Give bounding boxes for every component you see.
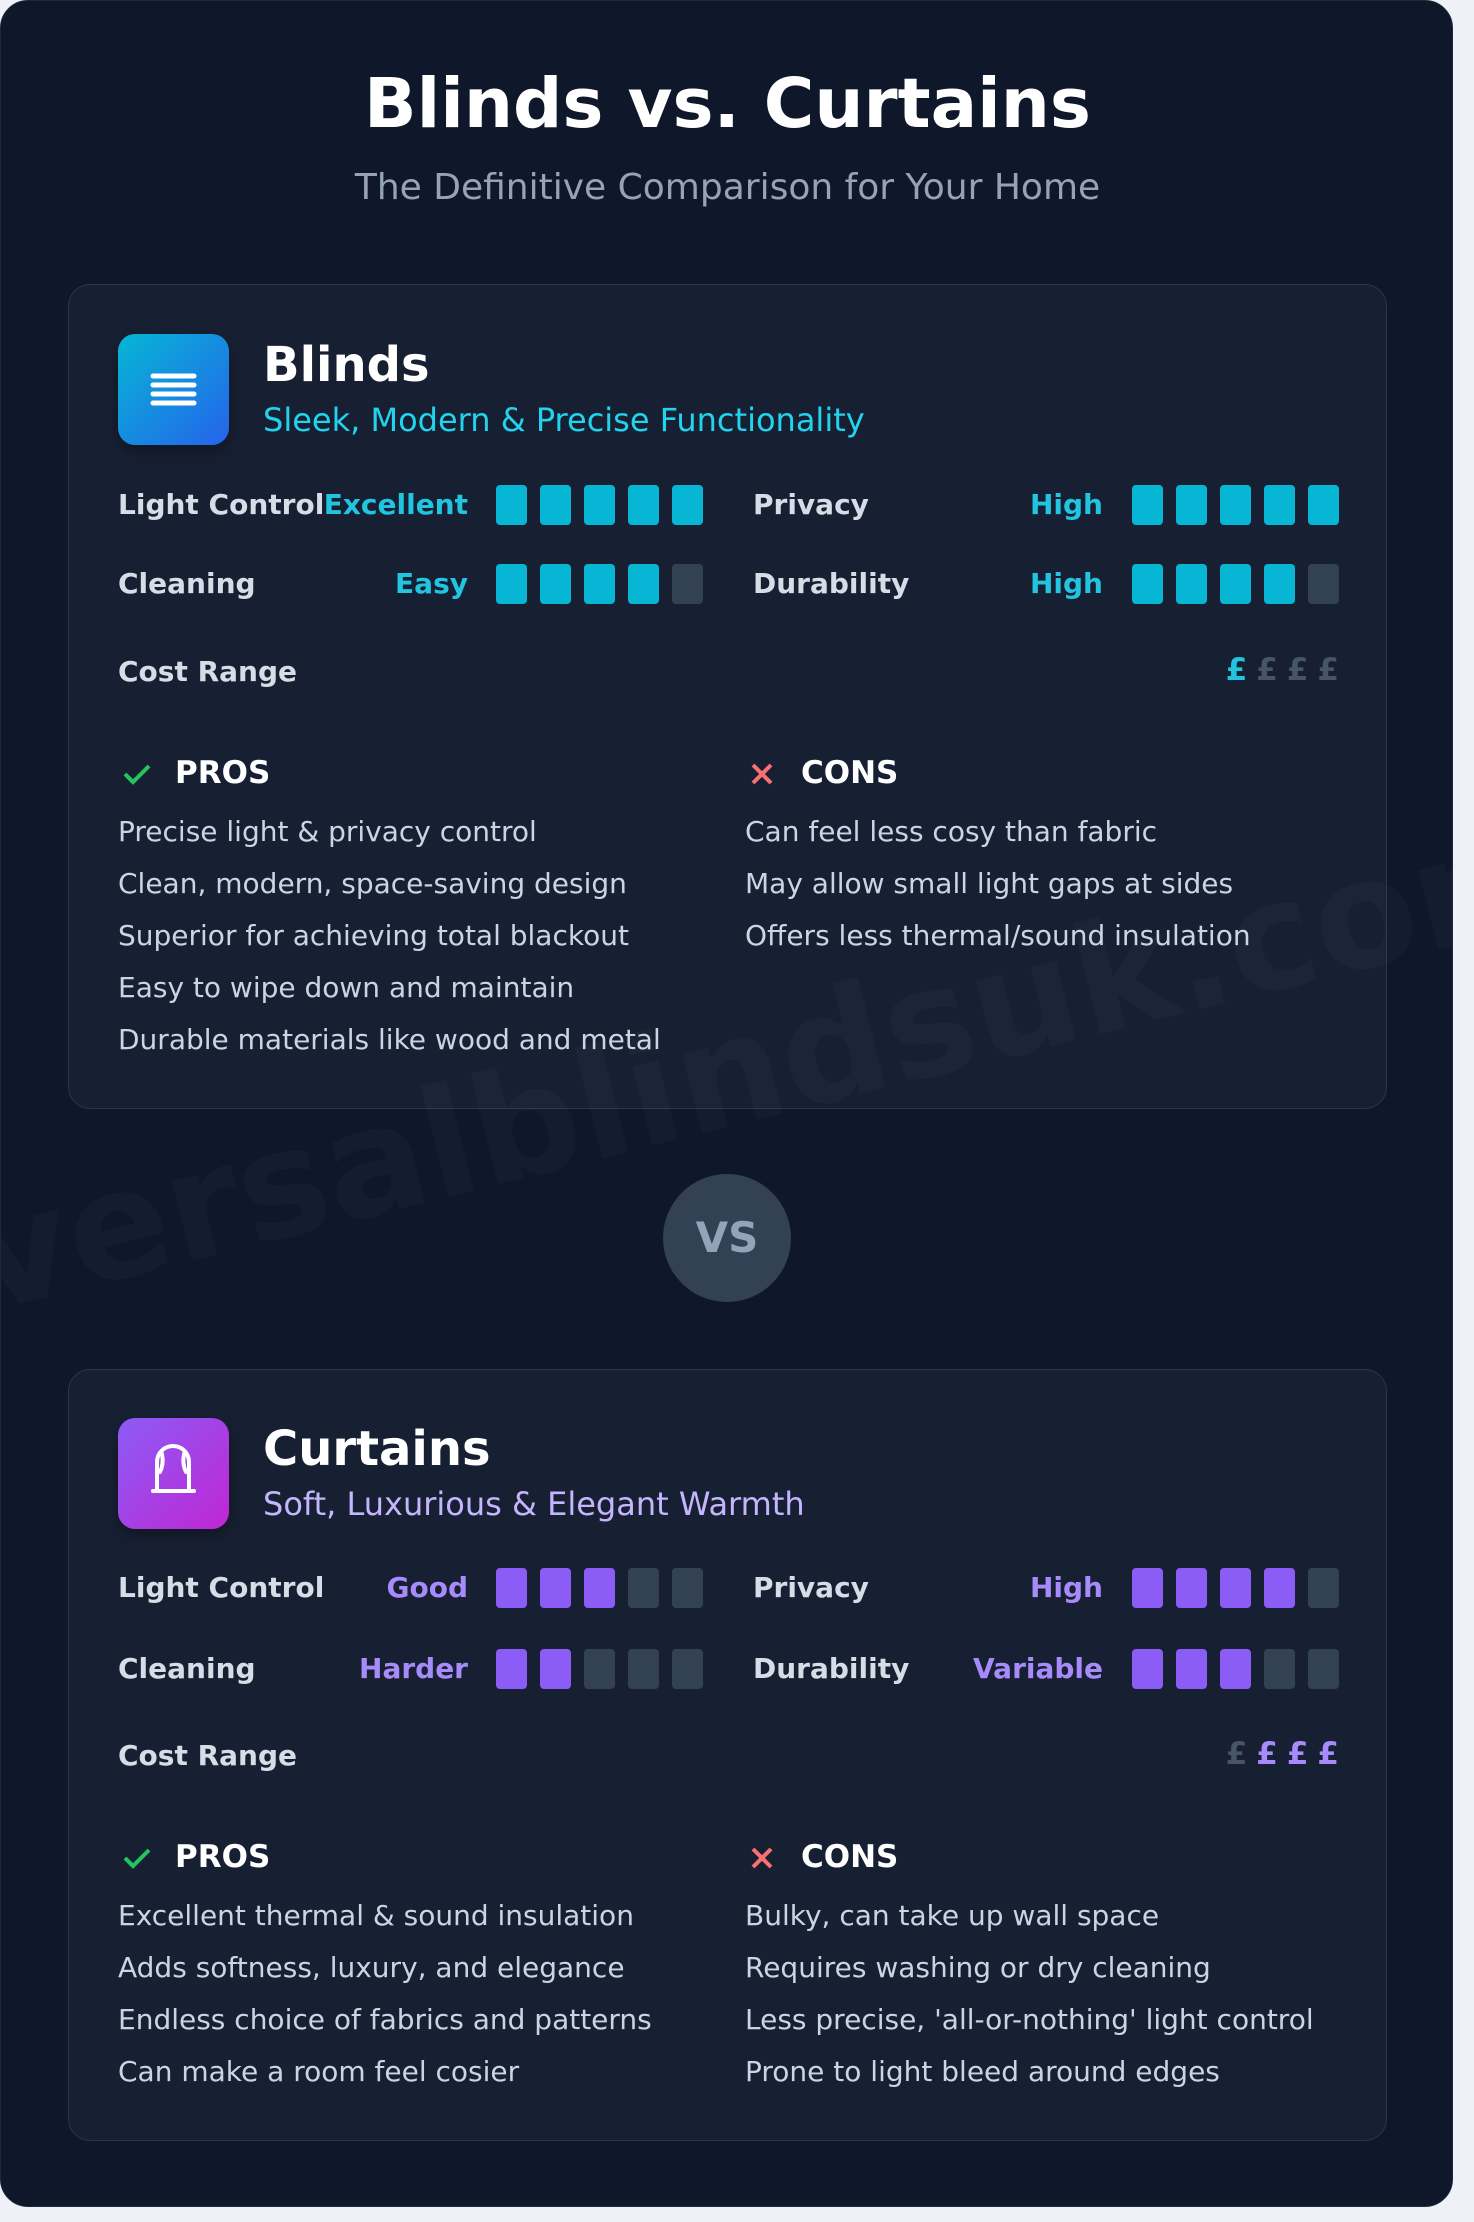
metric: light control: Light Control	[118, 1571, 324, 1604]
panel: blinds: Offers less thermal/sound insulation	[745, 919, 1251, 952]
panel: curtains: Can make a room feel cosier	[118, 2055, 519, 2088]
cost range: Cost Range	[118, 655, 297, 688]
panel: curtains: Bulky, can take up wall space	[745, 1899, 1159, 1932]
panel: blinds: Durable materials like wood and metal	[118, 1023, 661, 1056]
panel: blinds: Clean, modern, space-saving design	[118, 867, 627, 900]
icon: check	[124, 1848, 150, 1869]
metric: cleaning: Cleaning	[118, 1652, 256, 1685]
icon: curtains	[118, 1418, 229, 1529]
metric: durability: Durability	[753, 1652, 909, 1685]
panel: blinds: PROS	[175, 755, 270, 791]
title: Blinds vs. Curtains	[364, 64, 1091, 144]
panel: blinds: Excellent	[324, 488, 468, 521]
tagline: Sleek, Modern & Precise Functionality	[263, 401, 865, 439]
panel: curtains: Less precise, 'all-or-nothing' light control	[745, 2003, 1314, 2036]
icon: check	[124, 764, 150, 785]
heading: blinds: Blinds	[263, 337, 430, 393]
metric: privacy: Privacy	[753, 1571, 869, 1604]
panel: blinds: Can feel less cosy than fabric	[745, 815, 1157, 848]
panel: curtains: Adds softness, luxury, and elegance	[118, 1951, 625, 1984]
panel: curtains: ££££	[1226, 1736, 1348, 1772]
panel: curtains: Harder	[359, 1652, 468, 1685]
panel: curtains: CONS	[801, 1839, 898, 1875]
panel: curtains: High	[1030, 1571, 1103, 1604]
icon: blinds	[118, 334, 229, 445]
pros: blinds	[124, 755, 270, 791]
panel: blinds: May allow small light gaps at sides	[745, 867, 1233, 900]
panel: blinds: Easy to wipe down and maintain	[118, 971, 574, 1004]
panel: curtains: Requires washing or dry cleaning	[745, 1951, 1211, 1984]
panel: curtains: PROS	[175, 1839, 270, 1875]
cons: curtains	[752, 1839, 898, 1875]
panel: curtains: Endless choice of fabrics and patterns	[118, 2003, 652, 2036]
metric: durability: Durability	[753, 567, 909, 600]
tagline: Soft, Luxurious & Elegant Warmth	[263, 1485, 805, 1523]
metric: privacy: Privacy	[753, 488, 869, 521]
panel: curtains: Prone to light bleed around edges	[745, 2055, 1220, 2088]
panel: blinds: Precise light & privacy control	[118, 815, 537, 848]
vs badge: VS	[696, 1213, 758, 1262]
panel: blinds: High	[1030, 567, 1103, 600]
subtitle: The Definitive Comparison for Your Home	[355, 167, 1100, 208]
panel: curtains: Variable	[973, 1652, 1103, 1685]
metric: cleaning: Cleaning	[118, 567, 256, 600]
pros: curtains	[124, 1839, 270, 1875]
vs badge	[663, 1174, 791, 1302]
panel: curtains: Good	[386, 1571, 468, 1604]
panel: blinds: High	[1030, 488, 1103, 521]
panel: blinds: Easy	[395, 567, 468, 600]
heading: curtains: Curtains	[263, 1421, 491, 1477]
panel: blinds: CONS	[801, 755, 898, 791]
panel: blinds: Superior for achieving total blackout	[118, 919, 629, 952]
icon: cross	[752, 1848, 772, 1868]
cons: blinds	[752, 755, 898, 791]
panel: blinds: ££££	[1226, 652, 1348, 688]
panel: blinds	[68, 284, 1387, 1109]
panel: curtains: Excellent thermal & sound insulation	[118, 1899, 634, 1932]
panel: curtains	[68, 1369, 1387, 2141]
cost range: Cost Range	[118, 1739, 297, 1772]
icon: cross	[752, 764, 772, 784]
metric: light control: Light Control	[118, 488, 324, 521]
